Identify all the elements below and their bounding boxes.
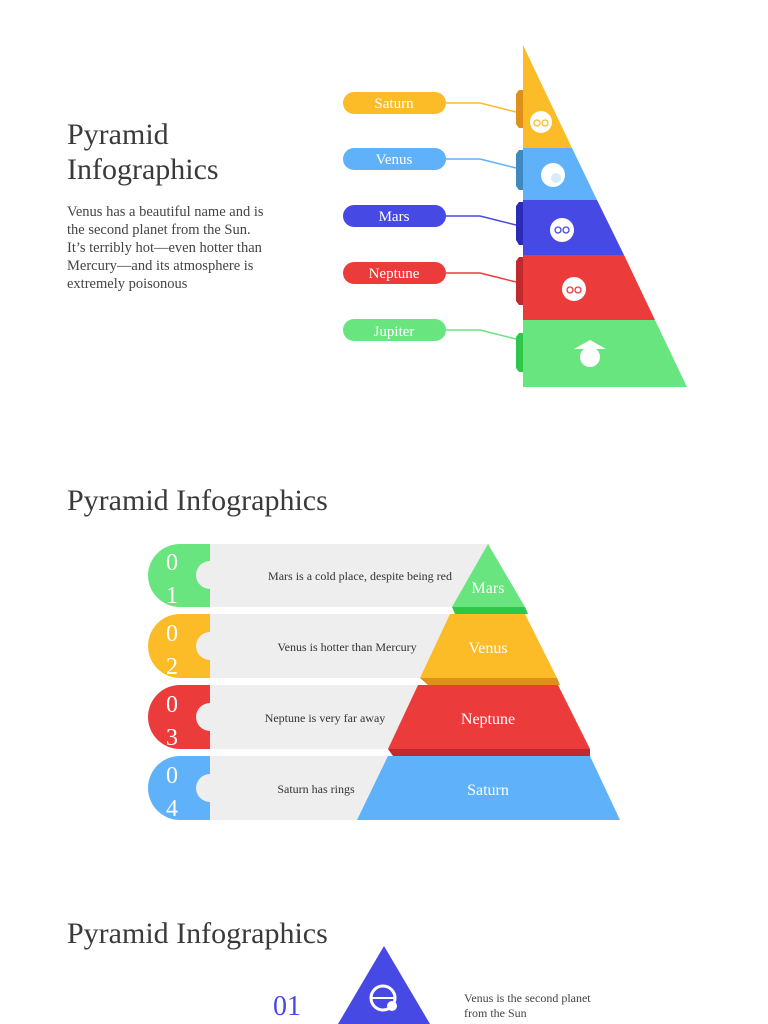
row 01: Mars	[472, 580, 504, 597]
pyramid band: Mars	[343, 200, 624, 255]
row 03	[148, 685, 590, 756]
text block: description	[67, 204, 264, 292]
pyramid band: Neptune: Neptune	[369, 266, 420, 282]
triangle with globe icon	[338, 946, 430, 1024]
pyramid band: Neptune	[343, 255, 655, 320]
row 04: 0	[166, 763, 178, 789]
text block: description: extremely poisonous	[67, 276, 187, 292]
pyramid band: Venus: Venus	[376, 152, 412, 168]
row 02: 2	[166, 654, 178, 680]
pyramid band: Mars: Mars	[379, 209, 410, 225]
row 01: 0	[166, 550, 178, 576]
title: section 1	[67, 118, 219, 186]
row 02: Venus is hotter than Mercury	[277, 640, 417, 654]
number 01: 01	[273, 991, 301, 1022]
pyramid band: Jupiter	[343, 319, 687, 387]
row 01	[148, 544, 528, 614]
row 02: 0	[166, 621, 178, 647]
title: section 2: Pyramid Infographics	[67, 484, 328, 517]
row 02	[148, 614, 560, 685]
text block: description: It’s terribly hot—even hotter than	[67, 240, 262, 256]
row 03: Neptune	[461, 711, 515, 728]
pyramid band: Saturn: Saturn	[374, 96, 414, 112]
row 04: Saturn has rings	[277, 782, 355, 796]
title: section 3: Pyramid Infographics	[67, 917, 328, 950]
row 04: Saturn	[467, 782, 509, 799]
text block: description: Venus has a beautiful name and is	[67, 204, 264, 220]
row 03: Neptune is very far away	[265, 711, 385, 725]
row 03: 3	[166, 725, 178, 751]
pyramid band: Venus	[343, 148, 597, 200]
row 04	[148, 756, 620, 822]
text block: description: the second planet from the Sun.	[67, 222, 251, 238]
row 01: Mars is a cold place, despite being red	[268, 569, 452, 583]
text block: description: Mercury—and its atmosphere is	[67, 258, 253, 274]
row 01: 1	[166, 583, 178, 609]
row 04: 4	[166, 796, 178, 822]
row 03: 0	[166, 692, 178, 718]
text: description: Venus is the second planet	[464, 991, 591, 1005]
text: description: from the Sun	[464, 1006, 527, 1020]
row 02: Venus	[468, 640, 508, 657]
pyramid band: Jupiter: Jupiter	[374, 324, 414, 340]
title: section 1: Pyramid	[67, 118, 169, 151]
pyramid band: Saturn	[343, 45, 572, 148]
title: section 1: Infographics	[67, 153, 219, 186]
